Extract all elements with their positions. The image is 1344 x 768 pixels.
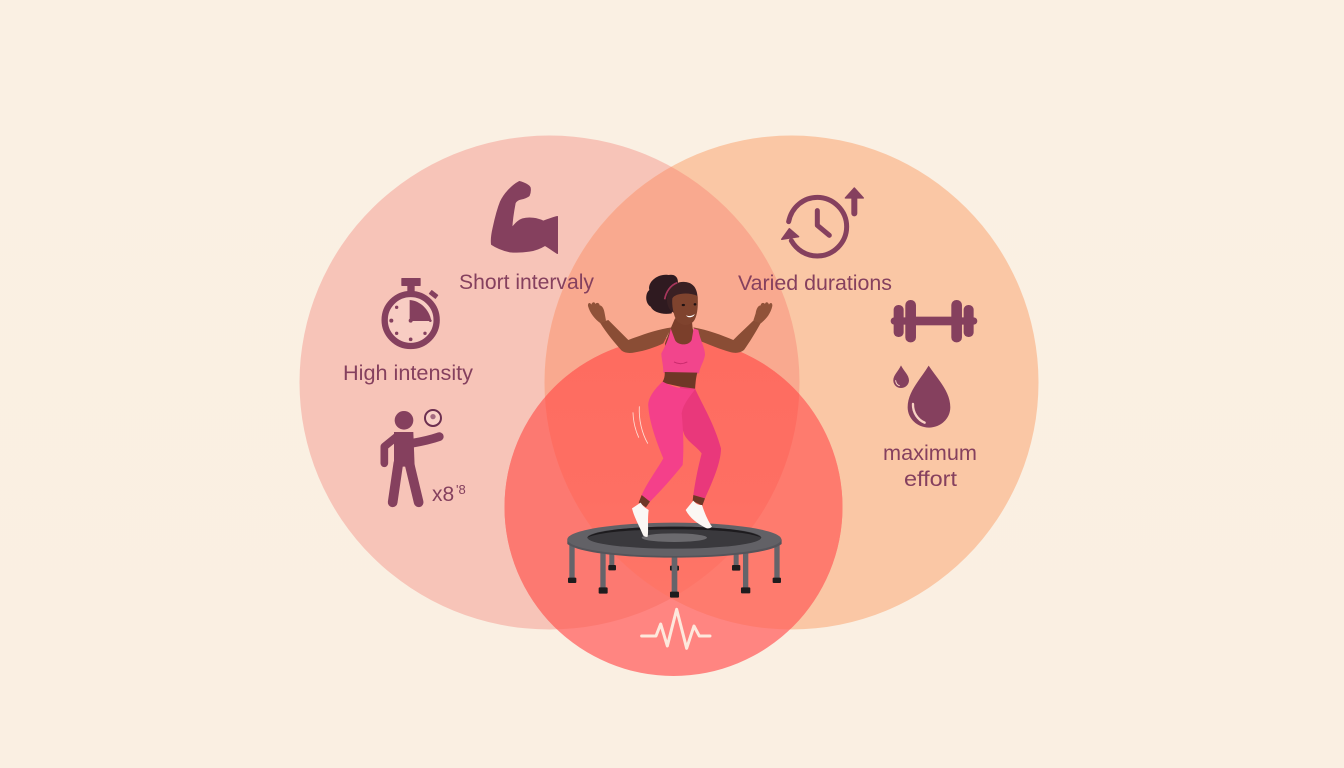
mat	[587, 527, 761, 549]
front leg	[642, 382, 695, 502]
icon: clock with arrows	[782, 188, 863, 256]
front legs	[569, 545, 780, 592]
right shoe	[686, 501, 712, 528]
icon: sweat drops	[893, 365, 950, 428]
lower body	[632, 372, 721, 537]
icon: trampoline	[567, 523, 782, 598]
label: x8 multiplier	[432, 482, 466, 506]
icon: dumbbell	[891, 300, 977, 342]
label: x8 multiplier: '8	[456, 482, 466, 497]
circle: right	[544, 136, 1038, 630]
label: maximum effort: effort	[904, 468, 957, 491]
label: varied durations: Varied durations	[738, 272, 892, 295]
hair bun	[646, 275, 678, 314]
overlap: all three	[545, 338, 799, 558]
circle: left	[300, 136, 800, 630]
head	[672, 294, 698, 325]
back leg	[675, 387, 721, 498]
label: maximum effort: maximum	[883, 442, 977, 465]
icon: pulse line	[642, 609, 710, 648]
label: short intervaly: Short intervaly	[459, 271, 594, 294]
overlap: bottom and left	[504, 398, 671, 630]
hair back	[667, 282, 698, 313]
motion lines	[633, 407, 648, 443]
top	[661, 328, 705, 373]
ankles	[639, 495, 650, 507]
figure: woman jumping	[588, 275, 772, 537]
headband	[665, 283, 677, 299]
face details	[682, 303, 696, 306]
back legs	[609, 553, 739, 567]
icon: flexed muscle	[491, 182, 557, 253]
neck and chest	[665, 318, 698, 360]
icon: stopwatch	[385, 278, 439, 346]
overlap: left and right	[544, 167, 800, 397]
midriff	[662, 372, 697, 390]
overlap: bottom and right	[672, 394, 842, 630]
left shoe	[632, 503, 649, 537]
label: maximum effort	[883, 442, 977, 491]
label: x8 multiplier: x8	[432, 483, 454, 506]
rim	[567, 539, 782, 558]
arms and hands	[588, 302, 772, 353]
venn diagram circles	[300, 136, 1038, 676]
icon: person with timer	[384, 410, 441, 502]
label: high intensity: High intensity	[343, 362, 474, 385]
circle: bottom	[504, 338, 842, 676]
centre pad	[642, 533, 707, 542]
